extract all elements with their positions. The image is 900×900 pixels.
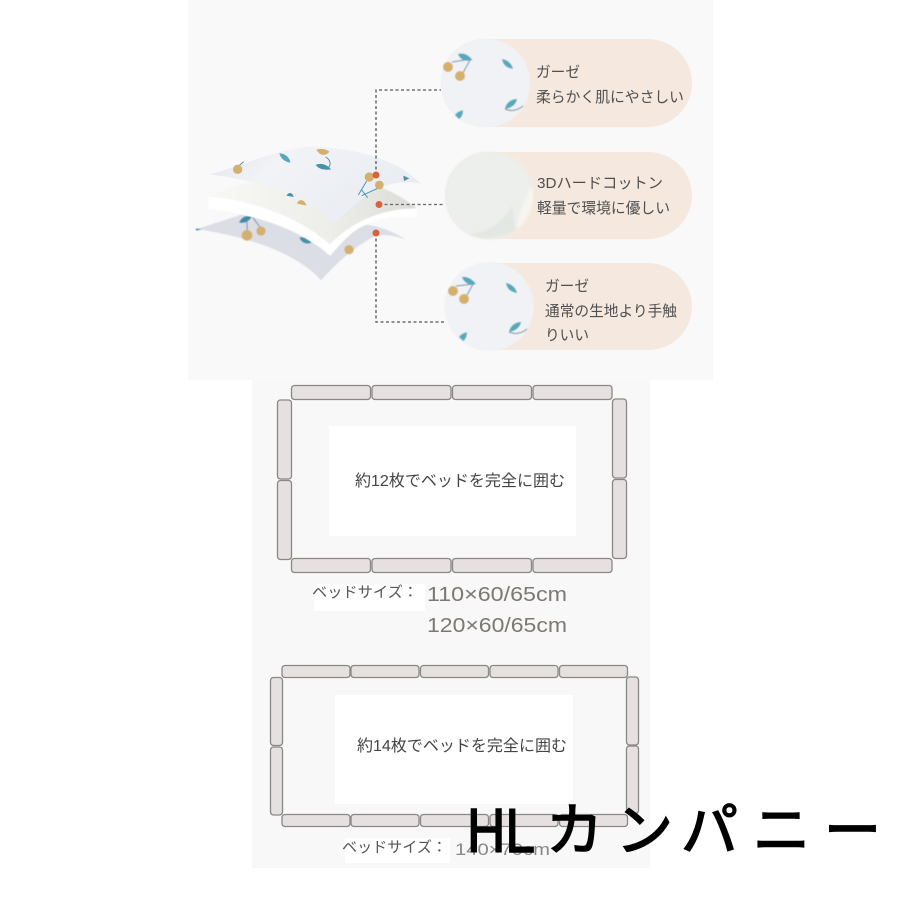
label mask: bed size 2 <box>345 838 450 863</box>
text: size 110: 110×60/65cm <box>427 584 567 606</box>
bottom bumper pieces <box>292 558 612 572</box>
icon: gauze swatch with cherries <box>441 38 530 128</box>
middle cotton layer <box>208 177 418 256</box>
diagram: 12 pieces bed layout <box>278 386 626 572</box>
text: 12 pieces: 約12枚でベッドを完全に囲む <box>355 472 565 490</box>
top bumper pieces <box>292 386 612 400</box>
callout: top gauze <box>441 38 692 128</box>
dashed leader: top gauze <box>376 90 441 175</box>
top gauze layer <box>210 147 421 224</box>
text: lightweight and eco friendly: 軽量で環境に優しい <box>537 200 670 217</box>
dashed leader: bottom gauze <box>376 233 445 322</box>
text: 3D hard cotton: 3Dハードコットン <box>537 175 663 192</box>
label mask: bed size 1 <box>314 584 425 611</box>
diagram: 14 pieces bed layout <box>270 666 638 826</box>
text: gauze: ガーゼ <box>545 278 589 295</box>
text: bed size label: ベッドサイズ： <box>342 839 447 856</box>
left bumper pieces <box>270 678 282 815</box>
bottom gauze layer <box>196 214 406 280</box>
fabric layer illustration <box>196 147 421 280</box>
text: gauze: ガーゼ <box>536 64 580 81</box>
text: size 120: 120×60/65cm <box>427 615 567 637</box>
panel: fabric layers background <box>188 0 713 380</box>
watermark: HL company <box>467 797 881 866</box>
text: soft on skin: 柔らかく肌にやさしい <box>536 89 684 106</box>
callout: bottom gauze <box>444 262 692 351</box>
pill background <box>445 152 692 239</box>
icon: gauze swatch with cherries <box>444 262 534 351</box>
left bumper pieces <box>278 400 292 560</box>
pill background <box>445 263 692 350</box>
text: 14 pieces: 約14枚でベッドを完全に囲む <box>357 737 567 755</box>
callout: 3D hard cotton <box>445 152 692 240</box>
watermark latin letters: HL <box>467 797 535 866</box>
bed area <box>335 695 573 804</box>
panel: bed layouts background <box>252 380 650 868</box>
text: line continuation: りいい <box>545 327 589 344</box>
right bumper pieces <box>612 399 626 558</box>
text: size 140: 140×70cm <box>455 840 550 859</box>
bed area <box>329 426 576 536</box>
pill background <box>441 39 692 127</box>
text: softer than regular fabric: 通常の生地より手触 <box>545 303 677 320</box>
dashed leader: cotton <box>379 204 445 206</box>
icon: cotton swatch <box>445 152 533 240</box>
top bumper pieces <box>282 666 628 678</box>
right bumper pieces <box>626 677 638 814</box>
watermark katakana: カンパニー <box>546 799 881 863</box>
text: bed size label: ベッドサイズ： <box>312 584 418 601</box>
bottom bumper pieces <box>282 814 628 826</box>
marker dots <box>372 172 382 236</box>
